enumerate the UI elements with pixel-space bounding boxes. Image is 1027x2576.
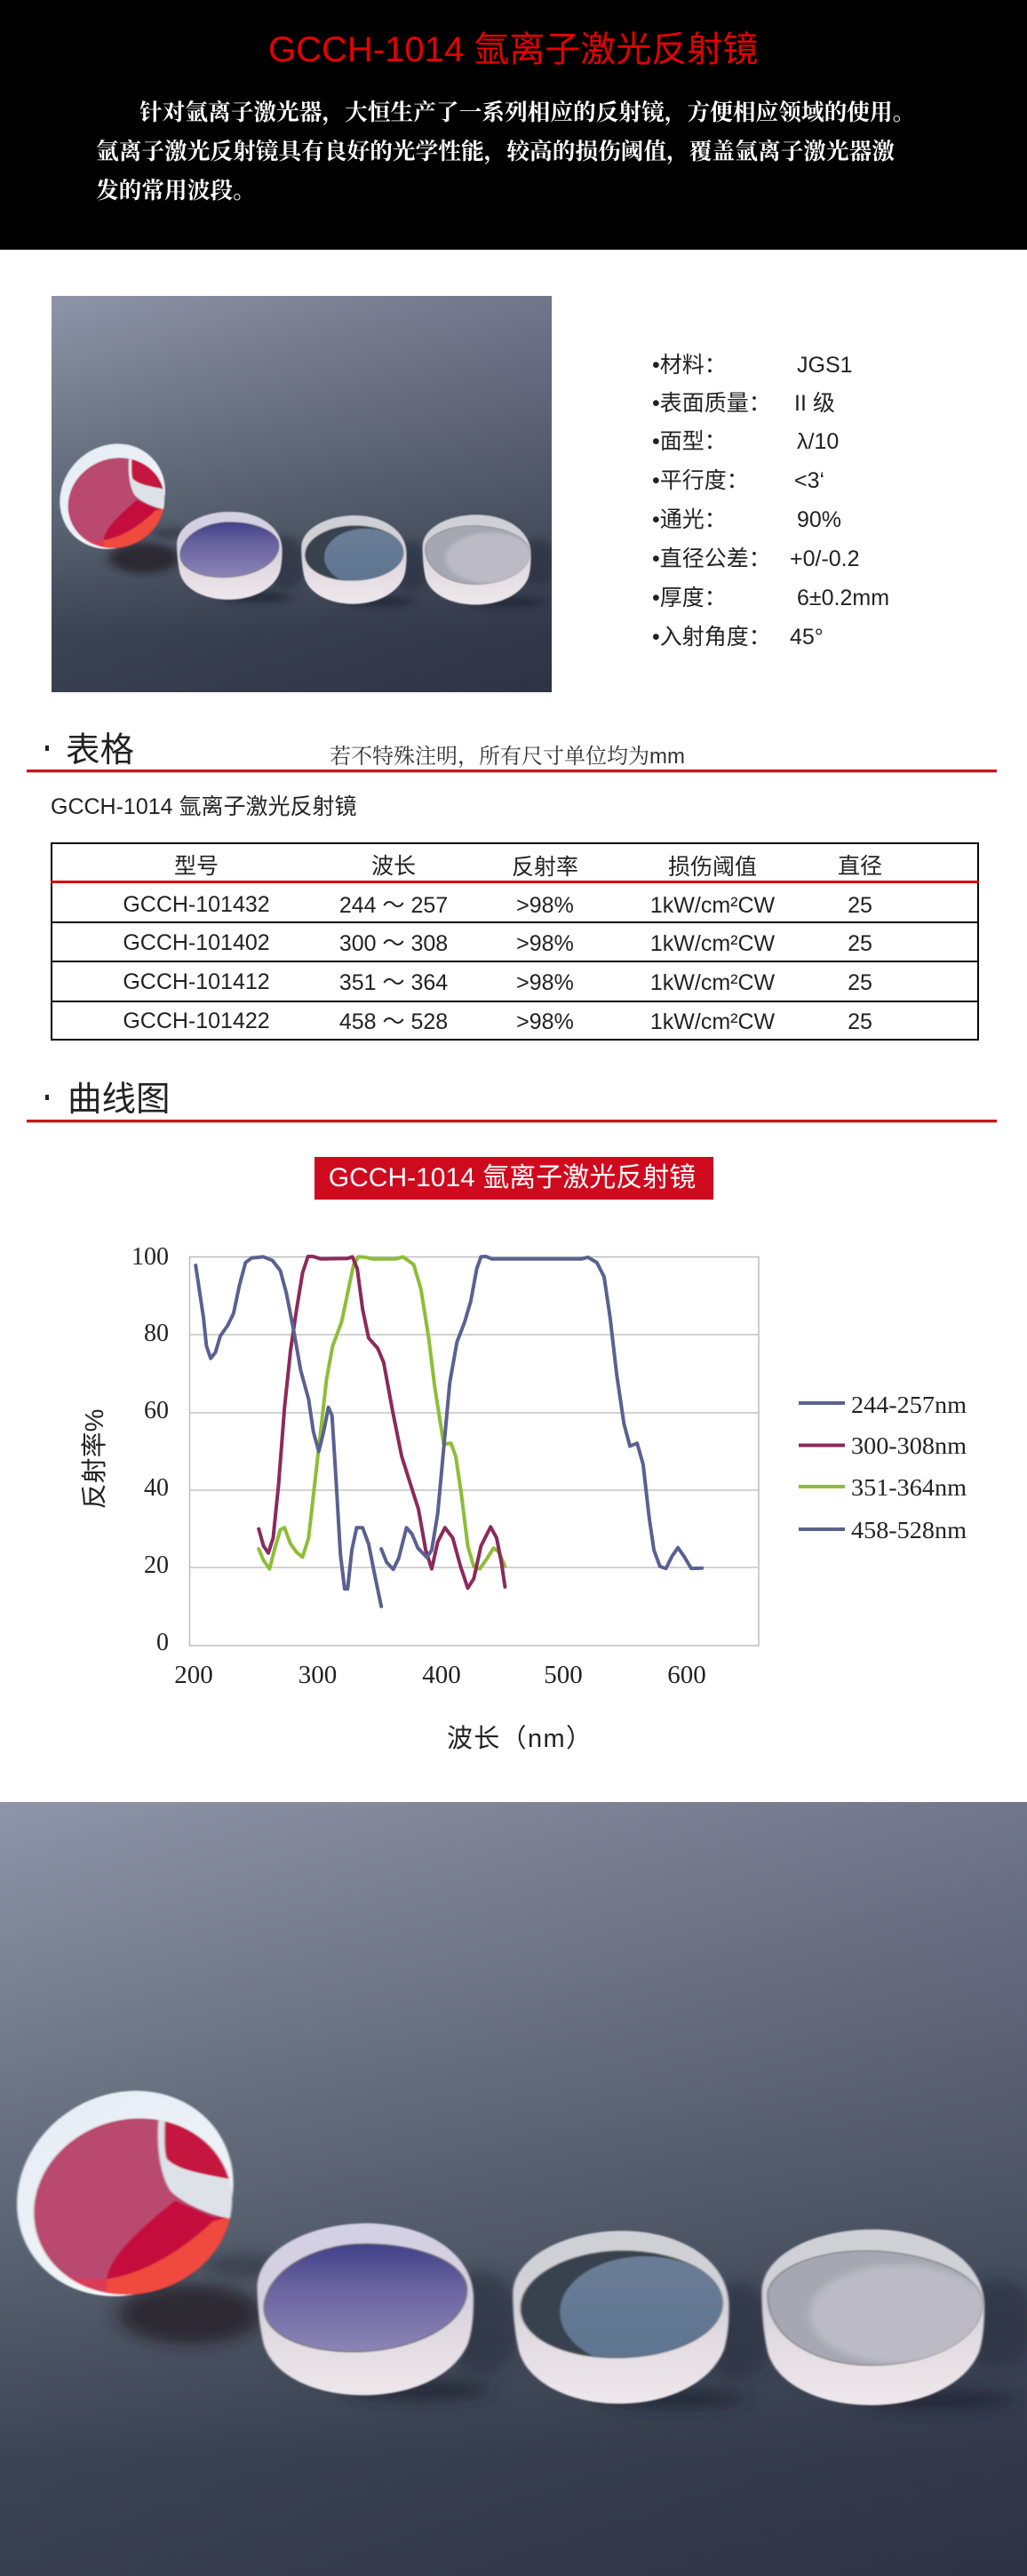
specifications list: •面型： [652,429,727,454]
specifications list: •直径公差： [652,546,771,571]
table subtitle: GCCH-1014 氩离子激光反射镜 [51,794,357,819]
row GCCH-101402: >98% [516,931,574,956]
red mirror [16,2090,235,2298]
legend: 458-528nm [851,1517,967,1543]
row GCCH-101432: 244 ～ 257 [339,893,448,918]
specifications list: +0/-0.2 [790,546,860,571]
y axis tick labels: 60 [144,1397,169,1424]
specifications list: •通光： [652,507,727,532]
x axis tick labels [174,1661,706,1689]
curve 244-257nm [195,1256,381,1607]
row GCCH-101412: 25 [848,970,872,995]
y axis tick labels [131,1243,169,1656]
table header row: 直径 [838,854,882,879]
row GCCH-101402: GCCH-101402 [123,930,270,955]
silver mirror [761,2229,992,2405]
legend: 300-308nm [851,1432,967,1459]
row GCCH-101432: 1kW/cm²CW [650,893,775,918]
row GCCH-101422: 458 ～ 528 [339,1009,448,1034]
specifications list: •材料： [652,353,727,378]
table header row: 波长 [371,854,416,879]
specifications list: 45° [790,625,824,650]
x axis tick labels: 400 [422,1661,461,1689]
x axis tick labels: 200 [174,1661,213,1689]
row GCCH-101422: 1kW/cm²CW [650,1009,775,1034]
y axis tick labels: 20 [144,1551,169,1579]
row GCCH-101412: 1kW/cm²CW [650,970,775,995]
row GCCH-101412 [123,969,872,995]
y axis tick labels: 100 [131,1243,169,1271]
row GCCH-101412: 351 ～ 364 [339,970,448,995]
curve 351-364nm [259,1256,505,1569]
x axis tick labels: 500 [544,1661,583,1689]
y axis tick labels: 80 [144,1320,169,1347]
specifications list: λ/10 [797,429,839,454]
reflectance line chart [80,1243,967,1753]
row GCCH-101432: GCCH-101432 [123,892,270,917]
curve 458-528nm [381,1256,702,1569]
section heading: curves: 曲线图 [68,1081,171,1119]
curves [195,1256,702,1607]
specifications list: •入射角度： [652,625,771,650]
specifications list: <3‘ [794,468,824,493]
spec table [51,842,979,1041]
y axis tick labels: 40 [144,1474,169,1502]
chart title badge [314,1157,713,1200]
header band [0,0,1027,250]
section heading: curves [27,1081,997,1123]
row GCCH-101402: 25 [848,931,872,956]
legend: 244-257nm [851,1392,967,1418]
legend: 351-364nm [851,1474,967,1501]
section heading: table: 表格 [66,731,134,770]
intro paragraph [96,100,915,203]
specifications list: 90% [797,507,841,532]
specifications list: II 级 [794,391,835,416]
large product photo: four coated mirrors [0,1802,1027,2576]
section heading: table [27,731,997,773]
y axis title: 反射率% [80,1409,109,1509]
row GCCH-101402: 300 ～ 308 [339,931,448,956]
row GCCH-101402 [123,930,872,956]
chart title badge: GCCH-1014 氩离子激光反射镜 [329,1163,696,1192]
intro paragraph: 发的常用波段。 [96,178,256,203]
intro paragraph: 针对氩离子激光器，大恒生产了一系列相应的反射镜，方便相应领域的使用。 [139,100,915,125]
y axis tick labels: 0 [156,1629,169,1656]
row GCCH-101432: >98% [516,893,574,918]
row GCCH-101422: GCCH-101422 [123,1009,270,1033]
blue-grey mirror [513,2231,730,2404]
x axis tick labels: 600 [667,1661,706,1689]
x axis tick labels: 300 [299,1661,337,1689]
curve 300-308nm [259,1256,505,1588]
specifications list: 6±0.2mm [797,586,889,610]
product photo: four coated mirrors [52,296,552,692]
row GCCH-101412: >98% [516,970,574,995]
specifications list: JGS1 [797,353,853,378]
row GCCH-101422: 25 [848,1009,872,1034]
x axis title: 波长（nm） [447,1724,592,1753]
row GCCH-101422: >98% [516,1009,574,1034]
table header row: 反射率 [512,855,578,880]
title: GCCH-1014 氩离子激光反射镜 [268,30,758,69]
specifications list: •平行度： [652,468,749,493]
section heading: table: 若不特殊注明，所有尺寸单位均为mm [330,745,685,769]
specifications list [652,353,889,650]
row GCCH-101422 [123,1009,872,1034]
row GCCH-101432 [123,892,872,918]
table header row: 型号 [174,854,219,879]
specifications list: •表面质量： [652,391,771,416]
table header row: 损伤阈值 [668,855,757,880]
row GCCH-101412: GCCH-101412 [123,969,270,994]
intro paragraph: 氩离子激光反射镜具有良好的光学性能，较高的损伤阈值，覆盖氩离子激光器激 [96,139,895,164]
purple mirror [258,2223,474,2396]
row GCCH-101402: 1kW/cm²CW [650,931,775,956]
table header row [174,854,882,880]
row GCCH-101432: 25 [848,893,872,918]
specifications list: •厚度： [652,586,727,610]
legend [799,1392,967,1543]
